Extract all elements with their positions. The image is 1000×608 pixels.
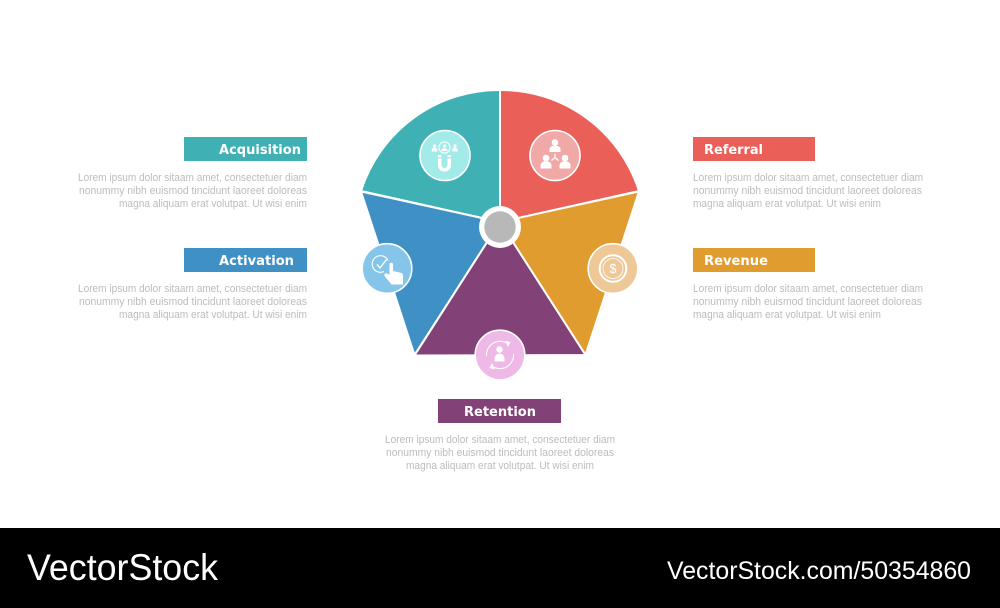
segment: acquisition xyxy=(361,90,500,222)
heading: revenue xyxy=(693,248,815,272)
icon: revenue coin xyxy=(588,244,638,293)
heading: activation: Activation xyxy=(219,254,294,269)
text block: acquisition xyxy=(78,172,308,210)
text block: activation xyxy=(78,283,308,321)
text block: activation: nonummy nibh euismod tincidunt laoreet doloreas xyxy=(79,296,308,308)
heading: revenue: Revenue xyxy=(704,254,768,269)
icon: acquisition magnet xyxy=(420,130,470,180)
text block: activation: Lorem ipsum dolor sitaam amet, consectetuer diam xyxy=(78,283,307,295)
heading: referral xyxy=(693,137,815,161)
text block: retention xyxy=(385,434,615,472)
text block: acquisition: nonummy nibh euismod tincidunt laoreet doloreas xyxy=(79,185,308,197)
icon: revenue coin: $ xyxy=(610,262,617,276)
text block: activation: magna aliquam erat volutpat. Ut wisi enim xyxy=(119,309,307,321)
panel: revenue xyxy=(693,248,923,321)
watermark url text: VectorStock.com/50354860 xyxy=(667,557,971,585)
text block: retention: nonummy nibh euismod tincidunt laoreet doloreas xyxy=(386,447,615,459)
segment: retention xyxy=(414,222,586,356)
heading: referral: Referral xyxy=(704,143,763,158)
text block: acquisition: Lorem ipsum dolor sitaam amet, consectetuer diam xyxy=(78,172,307,184)
heading: acquisition: Acquisition xyxy=(219,143,301,158)
text block: referral: nonummy nibh euismod tincidunt laoreet doloreas xyxy=(693,185,923,197)
segment: activation xyxy=(361,192,500,355)
text block: revenue: nonummy nibh euismod tincidunt laoreet doloreas xyxy=(693,296,923,308)
watermark footer bar xyxy=(0,528,1000,608)
segment: referral xyxy=(500,90,639,222)
heading: acquisition xyxy=(184,137,307,161)
icon: referral people xyxy=(530,130,580,180)
panel: acquisition xyxy=(78,137,308,210)
text block: referral: Lorem ipsum dolor sitaam amet, consectetuer diam xyxy=(693,172,923,184)
text block: referral: magna aliquam erat volutpat. Ut wisi enim xyxy=(693,198,881,210)
text block: retention: Lorem ipsum dolor sitaam amet, consectetuer diam xyxy=(385,434,615,446)
icon: retention person cycle xyxy=(475,330,525,380)
text block: revenue xyxy=(693,283,923,321)
icon: activation hand check xyxy=(362,244,412,293)
heading: retention: Retention xyxy=(464,405,536,420)
text block: revenue: Lorem ipsum dolor sitaam amet, consectetuer diam xyxy=(693,283,923,295)
pentagon chart xyxy=(361,90,639,355)
text block: retention: magna aliquam erat volutpat. Ut wisi enim xyxy=(406,460,594,472)
text block: revenue: magna aliquam erat volutpat. Ut wisi enim xyxy=(693,309,881,321)
text block: referral xyxy=(693,172,923,210)
panel: activation xyxy=(78,248,308,321)
panel: referral xyxy=(693,137,923,210)
center hub xyxy=(479,206,521,248)
panel: retention xyxy=(385,399,615,472)
segment: revenue xyxy=(500,192,639,355)
text block: acquisition: magna aliquam erat volutpat. Ut wisi enim xyxy=(119,198,307,210)
heading: retention xyxy=(438,399,561,423)
watermark logo text: VectorStock xyxy=(27,547,218,588)
heading: activation xyxy=(184,248,307,272)
